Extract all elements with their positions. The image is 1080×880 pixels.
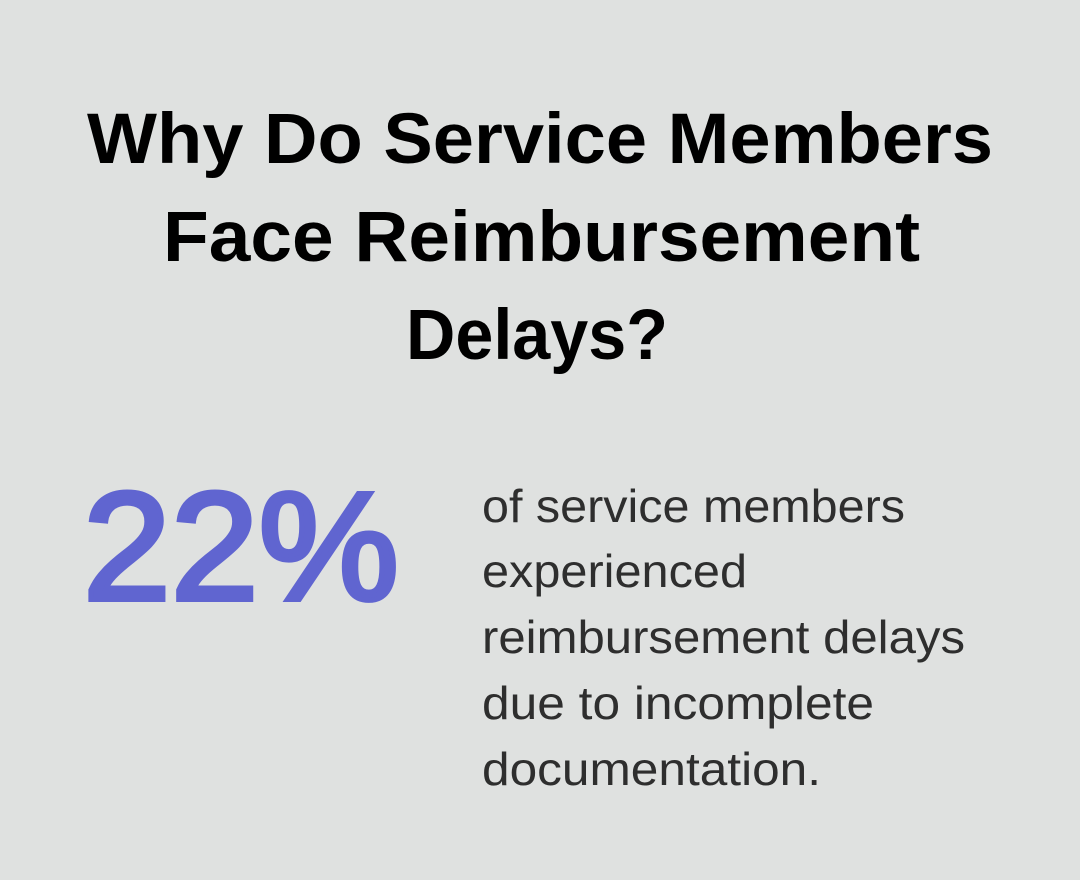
title (87, 100, 993, 375)
description text: experienced (482, 545, 747, 597)
title: Why Do Service Members (87, 100, 993, 179)
description text (482, 480, 965, 795)
description text: documentation. (482, 743, 821, 795)
description text: reimbursement delays (482, 611, 965, 663)
description text: due to incomplete (482, 677, 874, 729)
title: Delays? (406, 296, 668, 375)
title: Face Reimbursement (163, 198, 920, 277)
description text: of service members (482, 480, 905, 532)
statistic: 22%: 22% (83, 460, 399, 632)
